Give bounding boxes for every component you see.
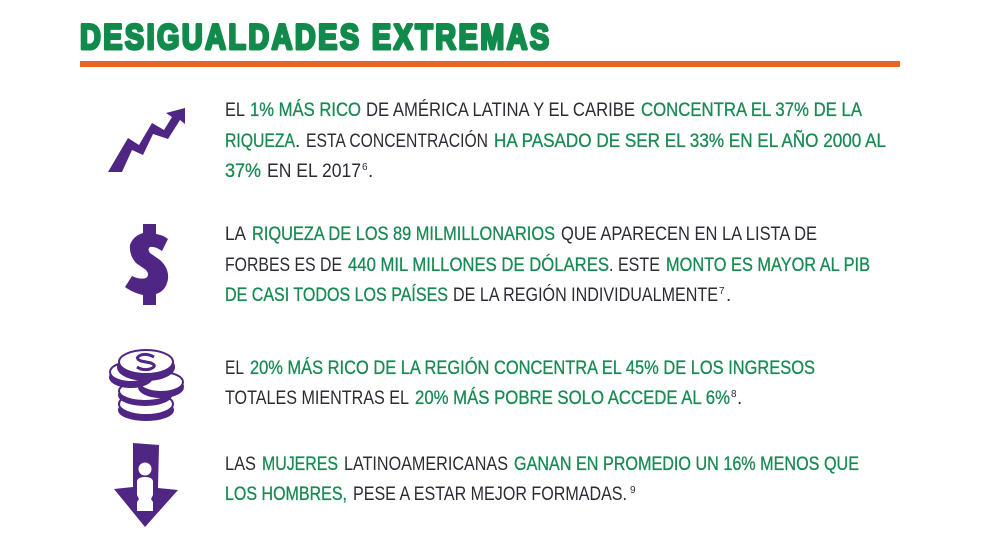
text block: billionaires: DE LA REGIÓN INDIVIDUALMENTE [453, 284, 718, 306]
text block: billionaires: . ESTE [609, 255, 660, 276]
text block: billionaires: LA [225, 224, 246, 245]
text block: women's pay gap: LAS [225, 454, 256, 475]
text block: income share: 8 [731, 389, 737, 400]
text block: billionaires: 7 [719, 286, 725, 297]
text block: women's pay gap: MUJERES [262, 454, 338, 475]
text block: billionaires: RIQUEZA DE LOS 89 MILMILLONARIOS [252, 224, 555, 245]
text block: richest 1%: EL [225, 100, 245, 121]
text block: income share: 20% MÁS POBRE SOLO ACCEDE AL 6% [415, 388, 730, 409]
text block: women's pay gap [225, 454, 859, 505]
text block: billionaires: . [726, 285, 731, 306]
text block: income share [225, 357, 815, 409]
icon: down arrow with woman [114, 443, 178, 527]
icon: rising zigzag arrow [108, 108, 185, 172]
text block: women's pay gap: 9 [630, 485, 636, 496]
text block: richest 1%: . [295, 131, 300, 152]
text block: billionaires: MONTO ES MAYOR AL PIB [666, 255, 870, 276]
text block: women's pay gap: GANAN EN PROMEDIO UN 16% MENOS QUE [514, 454, 859, 475]
text block: richest 1%: 6 [362, 162, 368, 173]
text block: women's pay gap: PESE A ESTAR MEJOR FORMADAS. [353, 484, 627, 505]
text block: richest 1%: DE AMÉRICA LATINA Y EL CARIBE [366, 100, 635, 121]
text block: billionaires: 440 MIL MILLONES DE DÓLARES [348, 254, 609, 276]
text block: richest 1%: RIQUEZA [225, 131, 295, 152]
text block: billionaires: QUE APARECEN EN LA LISTA DE [561, 224, 817, 245]
text block: income share: TOTALES MIENTRAS EL [225, 388, 409, 409]
text block: richest 1%: 1% MÁS RICO [250, 100, 361, 121]
text block: richest 1% [225, 100, 886, 182]
text block: billionaires [225, 224, 870, 306]
title: DESIGUALDADES EXTREMAS [80, 17, 549, 57]
text block: billionaires: FORBES ES DE [225, 255, 342, 276]
text block: income share: EL [225, 358, 244, 379]
text block: richest 1%: HA PASADO DE SER EL 33% EN EL AÑO 2000 AL [494, 130, 886, 152]
text block: richest 1%: ESTA CONCENTRACIÓN [306, 130, 488, 152]
text block: women's pay gap: LATINOAMERICANAS [344, 454, 508, 475]
text block: richest 1%: . [368, 161, 373, 182]
icon: dollar sign [125, 224, 168, 305]
text block: richest 1%: 37% [225, 161, 261, 182]
text block: income share: . [737, 388, 742, 409]
text block: income share: 20% MÁS RICO DE LA REGIÓN CONCENTRA EL 45% DE LOS INGRESOS [250, 357, 815, 379]
text block: richest 1%: EN EL 2017 [267, 161, 361, 182]
text block: richest 1%: CONCENTRA EL 37% DE LA [641, 100, 862, 121]
text block: billionaires: DE CASI TODOS LOS PAÍSES [225, 285, 448, 306]
title underline [80, 61, 900, 67]
icon: stack of coins [110, 350, 183, 420]
text block: women's pay gap: LOS HOMBRES, [225, 484, 347, 505]
